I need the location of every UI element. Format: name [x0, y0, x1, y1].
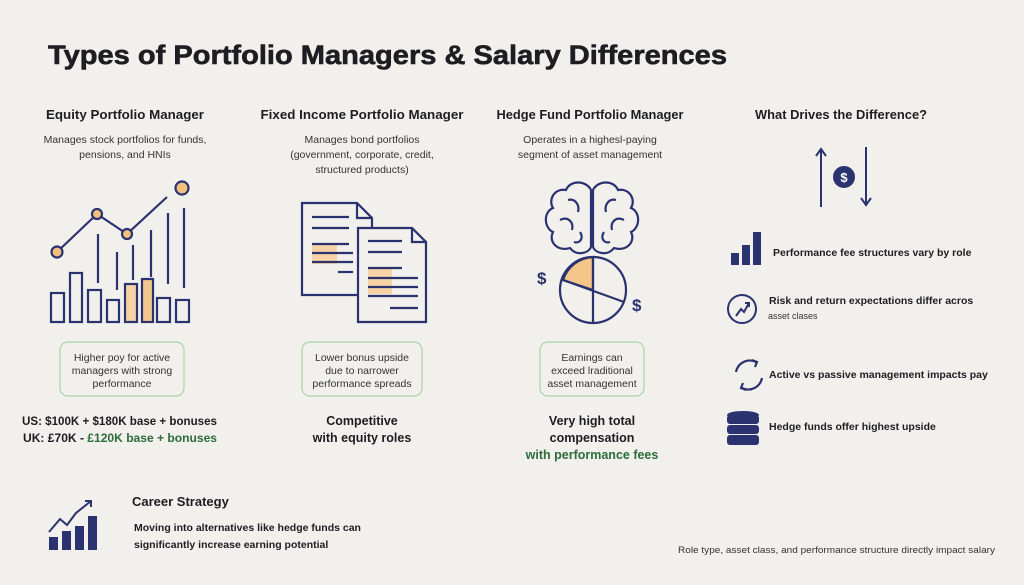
callout: hedge: exceed lraditional — [551, 365, 633, 377]
text: fixed description — [290, 134, 434, 176]
text: risk and return: asset clases — [768, 311, 818, 321]
text: career description: significantly increase earning potential — [134, 539, 328, 551]
text: hedge salary: compensation — [550, 431, 634, 445]
text: fixed salary — [312, 414, 411, 445]
text: equity salary — [22, 414, 217, 445]
chart: equity growth — [51, 182, 189, 322]
text: hedge salary: Very high total — [549, 414, 635, 428]
icon: coins — [727, 411, 759, 445]
text: hedge salary — [525, 414, 658, 462]
icon: dollar signs: $ — [632, 296, 642, 315]
heading: fixed income: Fixed Income Portfolio Manager — [260, 107, 464, 122]
icon: dollar signs — [537, 269, 642, 315]
text: hedge salary: with performance fees — [525, 448, 658, 462]
text: fee structures: Performance fee structures vary by role — [773, 247, 972, 259]
callout: fixed: due to narrower — [325, 365, 399, 377]
text: hedge description — [518, 134, 662, 161]
text: fixed salary: with equity roles — [312, 431, 411, 445]
callout: equity: managers with strong — [72, 365, 172, 377]
heading: equity: Equity Portfolio Manager — [46, 107, 204, 122]
footer note: Role type, asset class, and performance structure directly impact salary — [678, 545, 996, 555]
panel: career strategy — [49, 494, 361, 551]
text: career description: Moving into alternatives like hedge funds can — [134, 522, 361, 534]
heading: drives: What Drives the Difference? — [755, 107, 927, 122]
callout: equity: Higher poy for active — [74, 352, 170, 364]
icon: brain and pie — [546, 182, 638, 323]
icon: dollar signs: $ — [537, 269, 547, 288]
callout: hedge — [540, 342, 644, 396]
text: equity description: pensions, and HNIs — [79, 149, 171, 161]
panel: equity — [22, 107, 217, 445]
heading: career strategy: Career Strategy — [132, 494, 230, 509]
text: equity description: Manages stock portfolios for funds, — [44, 134, 206, 146]
callout: equity: performance — [93, 378, 152, 390]
text: equity salary: UK: £70K - £120K base + bonuses — [23, 431, 217, 445]
icon: arrows with dollar: $ — [840, 170, 848, 185]
callout: equity — [60, 342, 184, 396]
text: fixed description: structured products) — [315, 164, 409, 176]
text: risk and return — [768, 295, 973, 321]
icon: trend circle — [728, 295, 756, 323]
panel: what drives the difference — [727, 107, 988, 445]
text: hedge description: segment of asset management — [518, 149, 662, 161]
text: hedge funds upside: Hedge funds offer highest upside — [769, 421, 936, 433]
title: Types of Portfolio Managers & Salary Differences — [48, 40, 727, 70]
icon: rising bars — [49, 501, 97, 550]
text: fixed description: Manages bond portfolios — [304, 134, 420, 146]
panel: hedge fund — [496, 107, 684, 462]
text: equity description — [44, 134, 206, 161]
text: hedge description: Operates in a highesl-paying — [523, 134, 657, 146]
text: risk and return: Risk and return expectations differ acros — [769, 295, 973, 307]
text: equity salary: US: $100K + $180K base + bonuses — [22, 414, 217, 428]
icon: bar chart — [731, 232, 761, 265]
heading: hedge fund: Hedge Fund Portfolio Manager — [496, 107, 684, 122]
icon: arrows with dollar — [816, 147, 871, 207]
text: career description — [134, 522, 361, 551]
callout: fixed: Lower bonus upside — [315, 352, 409, 364]
panel: fixed income — [260, 107, 464, 445]
icon: documents — [302, 203, 426, 322]
callout: fixed — [302, 342, 422, 396]
callout: fixed: performance spreads — [312, 378, 412, 390]
text: fixed salary: Competitive — [326, 414, 398, 428]
callout: hedge: Earnings can — [561, 352, 623, 364]
icon: refresh — [736, 360, 762, 390]
text: fixed description: (government, corporate, credit, — [290, 149, 434, 161]
text: active vs passive: Active vs passive management impacts pay — [769, 369, 988, 381]
callout: hedge: asset management — [547, 378, 637, 390]
